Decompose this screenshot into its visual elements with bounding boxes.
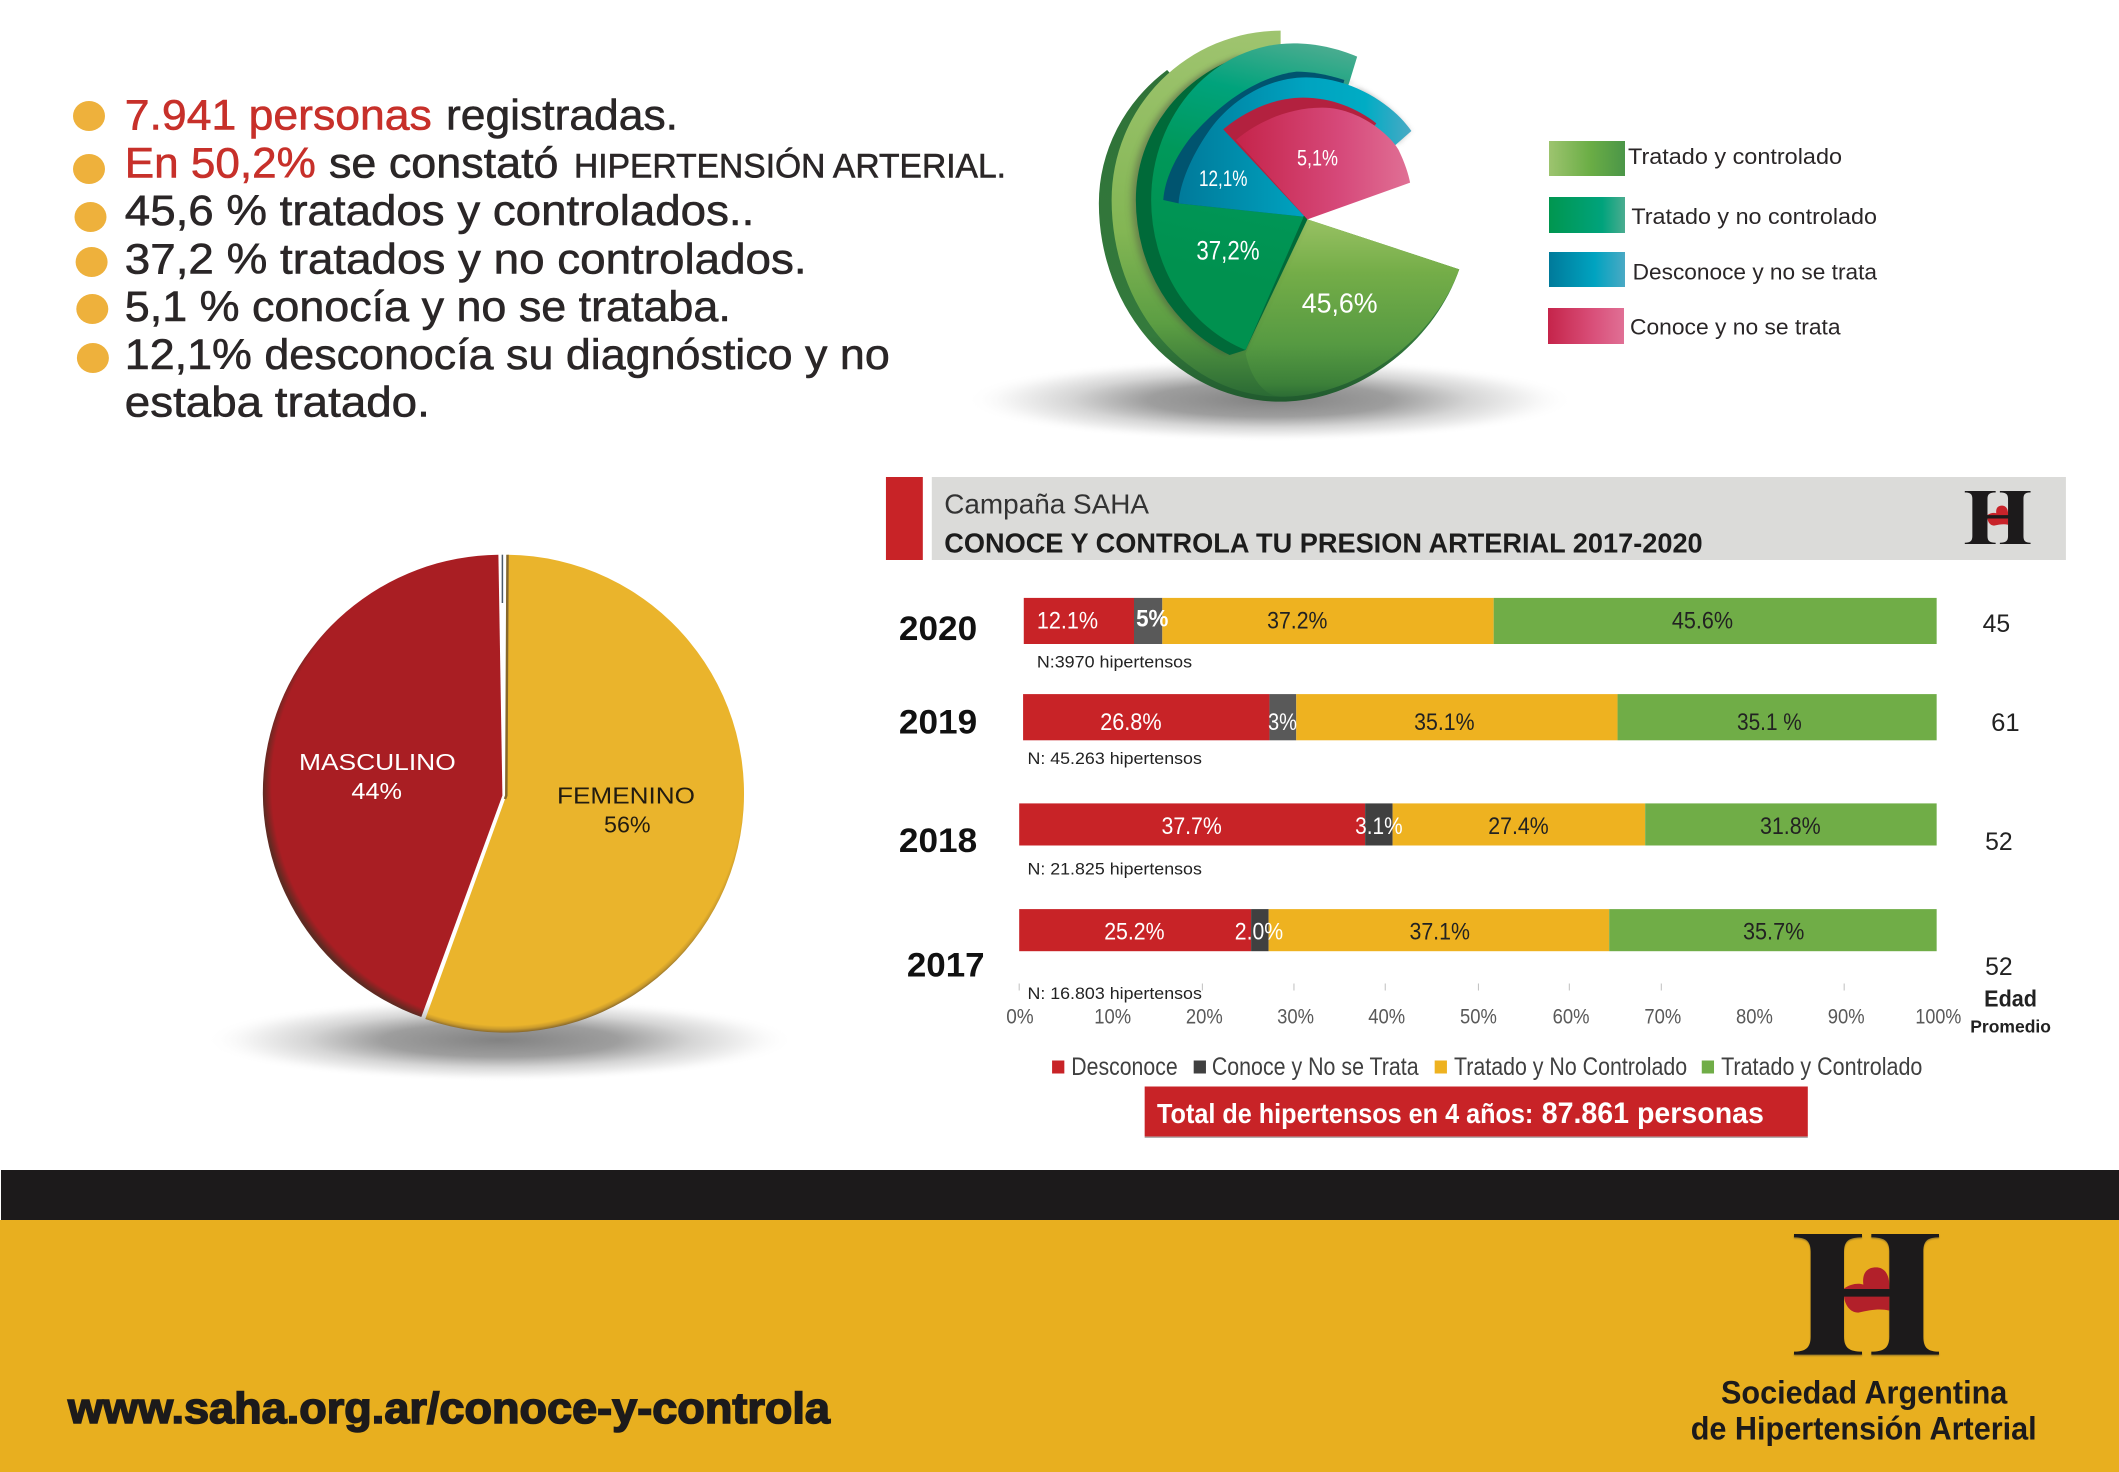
age column title: Edad xyxy=(1984,985,2037,1012)
swatch: tratado y no controlado xyxy=(1549,197,1625,233)
axis labels: 90% xyxy=(1828,1005,1865,1029)
chart header xyxy=(886,477,2066,560)
label: masculino: 44% xyxy=(351,778,402,804)
chart legend: Tratado y Controlado xyxy=(1721,1053,1922,1081)
line 5: 5,1 % conocía y no se trataba. xyxy=(125,283,731,331)
line 4: 37,2 % tratados y no controlados. xyxy=(125,235,807,283)
label: masculino: MASCULINO xyxy=(299,749,456,775)
bar row 2018: 27.4% xyxy=(1488,813,1549,840)
bar row 2019: 3% xyxy=(1268,709,1297,736)
age 2017: 52 xyxy=(1985,953,2013,981)
age column title: Promedio xyxy=(1970,1016,2051,1037)
year 2017: 2017 xyxy=(907,947,985,985)
line 1: 7.941 personas xyxy=(125,91,432,139)
gender pie chart xyxy=(263,555,744,1033)
bar row 2017: 35.7% xyxy=(1743,918,1804,946)
axis labels: 40% xyxy=(1368,1005,1405,1029)
label: femenino: 56% xyxy=(604,812,651,838)
age column title xyxy=(1970,985,2051,1037)
bar row 2019: 35.1 % xyxy=(1737,709,1802,736)
label: masculino xyxy=(299,749,456,804)
stacked bar chart xyxy=(899,598,2051,1138)
line 2: HIPERTENSIÓN ARTERIAL. xyxy=(574,147,1006,185)
line 7: estaba tratado. xyxy=(125,379,430,427)
axis labels: 30% xyxy=(1277,1005,1314,1029)
line 1: registradas. xyxy=(446,91,678,139)
chart legend xyxy=(1052,1053,1922,1081)
year 2018: 2018 xyxy=(899,822,977,860)
bar row 2017 xyxy=(1019,909,1937,951)
line 2 xyxy=(125,139,1006,187)
pie shapes xyxy=(1099,31,1459,402)
line 1 xyxy=(125,91,678,139)
label 37,2%: 37,2% xyxy=(1196,235,1260,265)
total callout: 87.861 personas xyxy=(1542,1097,1764,1130)
bar row 2017: 2.0% xyxy=(1235,918,1283,946)
swatch: conoce y no se trata xyxy=(1548,308,1624,344)
total callout xyxy=(1145,1086,1808,1138)
bullet 2 xyxy=(73,154,105,184)
bar row 2018: 31.8% xyxy=(1760,813,1821,840)
sample size 2020: N:3970 hipertensos xyxy=(1037,652,1192,672)
line 3: 45,6 % tratados y controlados.. xyxy=(125,187,754,235)
line 2: se constató xyxy=(329,139,558,187)
legend of 3D pie xyxy=(1548,141,1878,344)
label 5,1%: 5,1% xyxy=(1297,146,1338,171)
bar row 2018 xyxy=(1019,803,1937,846)
icon: small H logo xyxy=(1965,491,2031,544)
bullet 3 xyxy=(74,202,106,232)
bar row 2019 xyxy=(1023,694,1937,740)
axis labels: 10% xyxy=(1094,1005,1131,1029)
label 12,1%: 12,1% xyxy=(1199,166,1248,191)
bar row 2017: 37.1% xyxy=(1409,918,1470,946)
line 6: 12,1% desconocía su diagnóstico y no xyxy=(125,331,890,379)
shadow under gender pie xyxy=(205,998,795,1082)
age 2018: 52 xyxy=(1985,828,2013,856)
black strip xyxy=(1,1170,2119,1220)
bar row 2020 xyxy=(1024,598,1937,644)
bar row 2017: 25.2% xyxy=(1104,918,1165,946)
year 2019: 2019 xyxy=(899,703,977,742)
grey header band xyxy=(932,477,2066,560)
bar row 2019: 26.8% xyxy=(1100,709,1162,736)
chart title: CONOCE Y CONTROLA TU PRESION ARTERIAL 2017-2020 xyxy=(944,528,1703,559)
axis labels: 70% xyxy=(1644,1005,1681,1029)
logo: H with heart xyxy=(1794,1234,1939,1356)
chart legend: Desconoce xyxy=(1071,1053,1178,1081)
chart legend: Conoce y No se Trata xyxy=(1212,1053,1419,1081)
chart legend: Tratado y No Controlado xyxy=(1454,1053,1687,1081)
label 45,6%: 45,6% xyxy=(1302,287,1378,318)
legend text 2: Tratado y no controlado xyxy=(1631,204,1877,229)
legend text 3: Desconoce y no se trata xyxy=(1633,259,1878,284)
axis labels xyxy=(1006,1005,1961,1029)
sample size 2017: N: 16.803 hipertensos xyxy=(1027,984,1202,1003)
bar row 2020: 45.6% xyxy=(1672,607,1733,635)
axis labels: 20% xyxy=(1186,1005,1223,1029)
campaign name: Campaña SAHA xyxy=(944,489,1149,520)
total callout: Total de hipertensos en 4 años: xyxy=(1157,1098,1533,1129)
axis labels: 80% xyxy=(1736,1005,1773,1029)
summary list xyxy=(73,91,1006,427)
bar row 2019: 35.1% xyxy=(1414,709,1475,736)
yellow band xyxy=(0,1220,2119,1472)
bar row 2020: 12.1% xyxy=(1037,607,1098,635)
axis labels: 50% xyxy=(1460,1005,1497,1029)
age 2019: 61 xyxy=(1991,709,2020,737)
year 2020: 2020 xyxy=(899,610,977,648)
line 2: En 50,2% xyxy=(125,139,316,187)
website url: www.saha.org.ar/conoce-y-controla xyxy=(67,1384,831,1433)
3D pie chart xyxy=(1099,31,1459,402)
legend text 1: Tratado y controlado xyxy=(1628,144,1842,169)
bullet 6 xyxy=(77,343,109,373)
age 2020: 45 xyxy=(1983,610,2010,638)
swatch: tratado y controlado xyxy=(1549,141,1625,176)
bar row 2018: 3.1% xyxy=(1355,813,1403,840)
organization name: Sociedad Argentina xyxy=(1721,1374,2007,1410)
footer xyxy=(0,1170,2119,1472)
axis labels: 0% xyxy=(1006,1005,1034,1029)
bullet 5 xyxy=(76,294,108,324)
sample size 2019: N: 45.263 hipertensos xyxy=(1027,749,1202,768)
sample size 2018: N: 21.825 hipertensos xyxy=(1027,859,1202,879)
slice: femenino xyxy=(425,555,744,1033)
organization name xyxy=(1691,1374,2037,1446)
red accent block xyxy=(886,477,923,560)
bullet 1 xyxy=(73,101,105,131)
label: femenino: FEMENINO xyxy=(557,782,695,808)
axis labels: 100% xyxy=(1915,1005,1961,1029)
bar row 2018: 37.7% xyxy=(1162,813,1222,840)
bar row 2020: 37.2% xyxy=(1267,607,1327,635)
organization name: de Hipertensión Arterial xyxy=(1691,1410,2037,1446)
label: femenino xyxy=(557,782,695,838)
shadow under 3D pie xyxy=(965,358,1575,442)
swatch: desconoce y no se trata xyxy=(1549,252,1625,287)
axis labels: 60% xyxy=(1553,1005,1590,1029)
bullet 4 xyxy=(76,247,108,277)
slice: masculino xyxy=(263,555,502,1017)
bar row 2020: 5% xyxy=(1136,605,1168,633)
legend text 4: Conoce y no se trata xyxy=(1630,314,1841,339)
